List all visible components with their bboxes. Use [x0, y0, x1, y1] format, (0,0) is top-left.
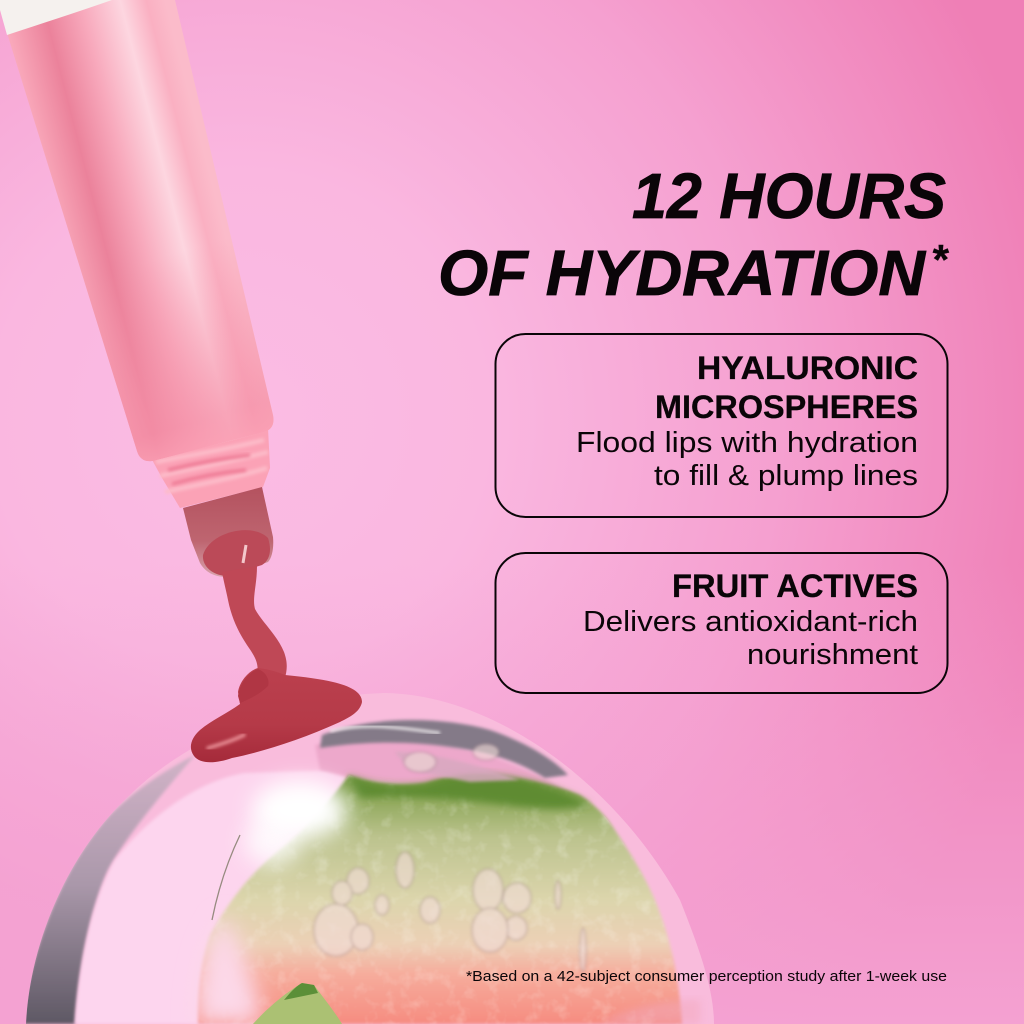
tube body: [0, 0, 274, 461]
panel heading: HYALURONIC: [697, 350, 918, 386]
left glass edge: [20, 755, 195, 1024]
tube threads: [150, 428, 270, 508]
panel text: [576, 427, 918, 492]
icon: serum drip and blob: [191, 530, 362, 762]
tube cap band: [0, 0, 112, 35]
icon: sphere with fruit: [20, 693, 714, 1024]
nozzle: [183, 487, 273, 577]
panel: fruit actives: [496, 553, 948, 693]
icon: pink tube: [0, 0, 274, 577]
panel text: to fill & plump lines: [654, 460, 918, 492]
panel heading: MICROSPHERES: [655, 389, 918, 425]
title: [438, 160, 949, 309]
title: *: [931, 236, 949, 283]
panel heading: [655, 350, 918, 425]
panel text: nourishment: [747, 639, 918, 671]
footnote: *Based on a 42-subject consumer perception study after 1-week use: [466, 968, 947, 985]
title: 12 HOURS: [632, 160, 946, 232]
panel: hyaluronic microspheres: [496, 334, 948, 517]
panel text: Delivers antioxidant-rich: [583, 606, 918, 638]
panel text: Flood lips with hydration: [576, 427, 918, 459]
bubbles: [314, 744, 586, 972]
panel heading: FRUIT ACTIVES: [672, 568, 918, 604]
title: OF HYDRATION: [438, 237, 927, 309]
panel text: [583, 606, 918, 671]
